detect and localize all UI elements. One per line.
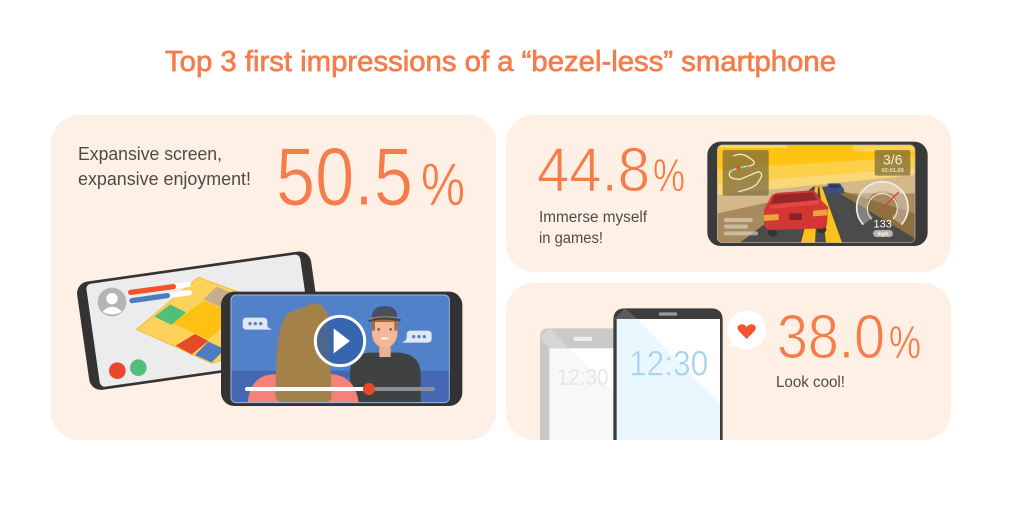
text: look cool label: Look cool! <box>776 374 845 391</box>
phone: bezel-less <box>613 308 723 440</box>
stat: 50.5 percent: % <box>421 151 465 218</box>
menu bars <box>724 218 758 235</box>
road <box>740 187 915 243</box>
illustration: two landscape phones <box>75 250 462 406</box>
phone: map and profile app <box>75 250 325 391</box>
phone: thick bezel: 12:30 <box>557 364 609 390</box>
avatar <box>98 288 126 316</box>
phone: bezel-less: 12:30 <box>629 345 708 384</box>
text: immerse label <box>539 209 648 247</box>
stat: 44.8 percent: % <box>653 149 685 201</box>
text: expansive screen label: Expansive screen, <box>78 143 222 164</box>
speedometer <box>857 182 908 225</box>
red car <box>764 190 828 237</box>
woman <box>248 303 359 403</box>
stat: 50.5 percent: 50.5 <box>276 130 413 223</box>
speed readout <box>873 219 893 237</box>
phone: video player <box>221 292 462 406</box>
illustration: two portrait phones <box>540 308 766 440</box>
title: Top 3 first impressions of a “bezel-less” smartphone <box>165 46 836 78</box>
lap counter: 3/6 <box>883 152 903 168</box>
panel: games <box>506 115 951 272</box>
illustration: racing game phone <box>707 142 928 246</box>
stat: 44.8 percent: 44.8 <box>537 136 650 205</box>
speed readout: 133 <box>874 219 892 231</box>
rival map panel <box>723 150 769 196</box>
lap counter: 02:01.00 <box>881 168 904 174</box>
lap counter <box>875 150 910 176</box>
text: expansive screen label <box>78 143 251 189</box>
progress bar <box>245 383 435 395</box>
panel: look cool <box>506 283 951 440</box>
speech bubbles <box>243 318 432 343</box>
icon: play button <box>315 316 365 366</box>
panel: expansive screen <box>51 115 496 440</box>
stat: 38.0 percent: % <box>889 316 921 368</box>
text: immerse label: Immerse myself <box>539 209 648 226</box>
icon: heart speech bubble <box>726 311 766 349</box>
phone: thick bezel <box>540 328 617 440</box>
text: expansive screen label: expansive enjoyment! <box>78 168 251 189</box>
man <box>350 306 421 403</box>
text: immerse label: in games! <box>539 230 603 247</box>
speed readout: mph <box>877 231 889 237</box>
stat: 38.0 percent: 38.0 <box>777 303 885 372</box>
far car <box>825 183 844 193</box>
